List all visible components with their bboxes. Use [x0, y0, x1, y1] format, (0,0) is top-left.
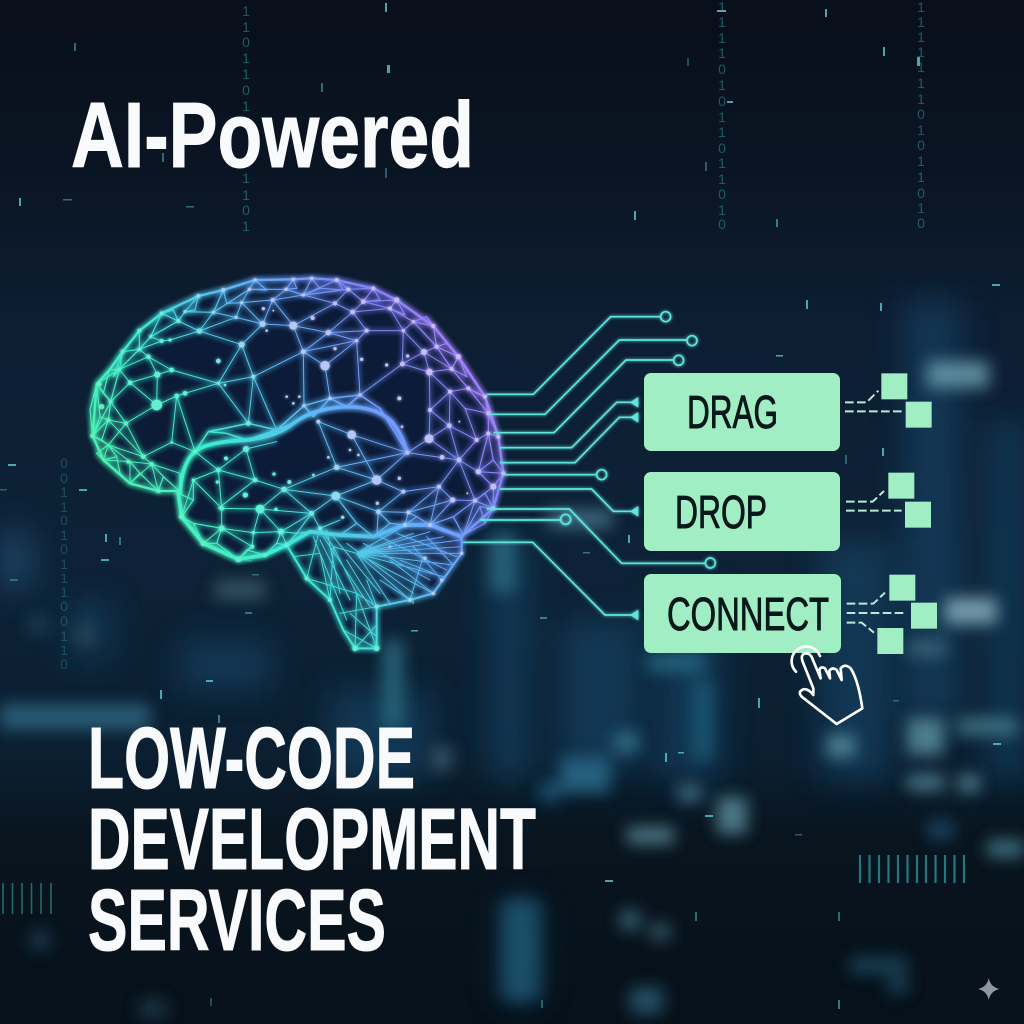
binary digit columns: 0: [718, 61, 726, 77]
binary digit columns: 1: [60, 499, 68, 515]
binary digit columns: 1: [60, 484, 68, 500]
binary digit columns: 0: [60, 613, 68, 629]
button: DRAG: DRAG: [687, 386, 778, 438]
binary digit columns: 1: [242, 218, 250, 234]
binary digit columns: 1: [718, 155, 726, 171]
brain network illustration: [90, 277, 505, 651]
brain nodes: [90, 277, 505, 651]
binary digit columns: 0: [60, 656, 68, 672]
binary digit columns: 0: [718, 93, 726, 109]
binary digit columns: 0: [718, 186, 726, 202]
binary digit columns: 1: [60, 556, 68, 572]
brain mesh lines: [90, 278, 503, 648]
binary digit columns: 0: [917, 215, 925, 231]
binary digit columns: 1: [917, 153, 925, 169]
binary digit columns: 1: [242, 187, 250, 203]
binary digit columns: 1: [917, 169, 925, 185]
binary digit columns: 1: [917, 75, 925, 91]
binary digit columns: 0: [718, 140, 726, 156]
binary digit columns: 1: [917, 91, 925, 107]
icon: pointing hand cursor: [792, 647, 862, 724]
binary digit columns: 1: [718, 30, 726, 46]
binary digit columns: 0: [718, 216, 726, 232]
binary digit columns: 1: [242, 98, 250, 114]
temporal lower edge: [178, 493, 462, 559]
circuit connector lines: [463, 312, 715, 620]
binary digit columns: 0: [917, 106, 925, 122]
brain interior shade: [93, 278, 503, 648]
button: CONNECT: CONNECT: [667, 588, 829, 640]
title: low-code development services: DEVELOPMENT: [88, 791, 536, 888]
binary digit columns: [60, 0, 925, 672]
binary digit columns: 1: [718, 14, 726, 30]
binary digit columns: 1: [60, 570, 68, 586]
binary digit columns: 1: [718, 202, 726, 218]
binary digit columns: 0: [242, 202, 250, 218]
connect output nodes: [847, 575, 937, 654]
binary digit columns: 0: [242, 82, 250, 98]
drag output nodes: [845, 373, 932, 428]
binary digit columns: 1: [718, 45, 726, 61]
button: CONNECT: [644, 574, 841, 653]
binary digit columns: 1: [718, 109, 726, 125]
mesh edges: [93, 278, 503, 508]
cerebellum fan lines: [293, 528, 462, 648]
button: DROP: [644, 472, 840, 551]
binary digit columns: 0: [60, 470, 68, 486]
binary digit columns: 1: [242, 50, 250, 66]
binary digit columns: 1: [242, 3, 250, 19]
binary digit columns: 1: [60, 628, 68, 644]
binary digit columns: 0: [60, 512, 68, 528]
drop output nodes: [846, 473, 931, 528]
barcode tick marks: bottom right: [860, 855, 964, 883]
binary digit columns: 1: [718, 171, 726, 187]
binary digit columns: 1: [917, 29, 925, 45]
dense edge band: [90, 278, 503, 535]
binary digit columns: 1: [917, 44, 925, 60]
binary digit columns: 1: [242, 19, 250, 35]
binary digit columns: 1: [242, 170, 250, 186]
outer contour: [93, 278, 503, 535]
title: low-code development services: LOW-CODE: [88, 710, 415, 807]
binary digit columns: 1: [60, 527, 68, 543]
title: low-code development services: SERVICES: [88, 872, 386, 969]
binary digit columns: 1: [917, 14, 925, 30]
title: AI-Powered: AI-Powered: [71, 83, 474, 187]
button: DROP: DROP: [675, 486, 767, 538]
binary digit columns: 1: [60, 584, 68, 600]
binary digit columns: 0: [917, 137, 925, 153]
binary digit columns: 1: [60, 642, 68, 658]
binary digit columns: 1: [718, 124, 726, 140]
title: low-code development services: [88, 710, 536, 969]
binary digit columns: 0: [60, 598, 68, 614]
sylvian fissure: [180, 407, 407, 493]
binary digit columns: 1: [917, 200, 925, 216]
binary digit columns: 1: [917, 122, 925, 138]
binary digit columns: 0: [242, 34, 250, 50]
binary digit columns: 1: [242, 66, 250, 82]
binary digit columns: 1: [718, 77, 726, 93]
binary digit columns: 1: [917, 59, 925, 75]
cerebellum contour: [287, 537, 462, 648]
icon: sparkle watermark: [978, 978, 1000, 1000]
barcode tick marks: bottom left: [3, 883, 51, 914]
binary digit columns: 0: [60, 541, 68, 557]
blurred city skyline: [0, 300, 1024, 1019]
button: DRAG: [644, 373, 840, 451]
binary digit columns: 0: [917, 185, 925, 201]
binary digit columns: 0: [60, 455, 68, 471]
